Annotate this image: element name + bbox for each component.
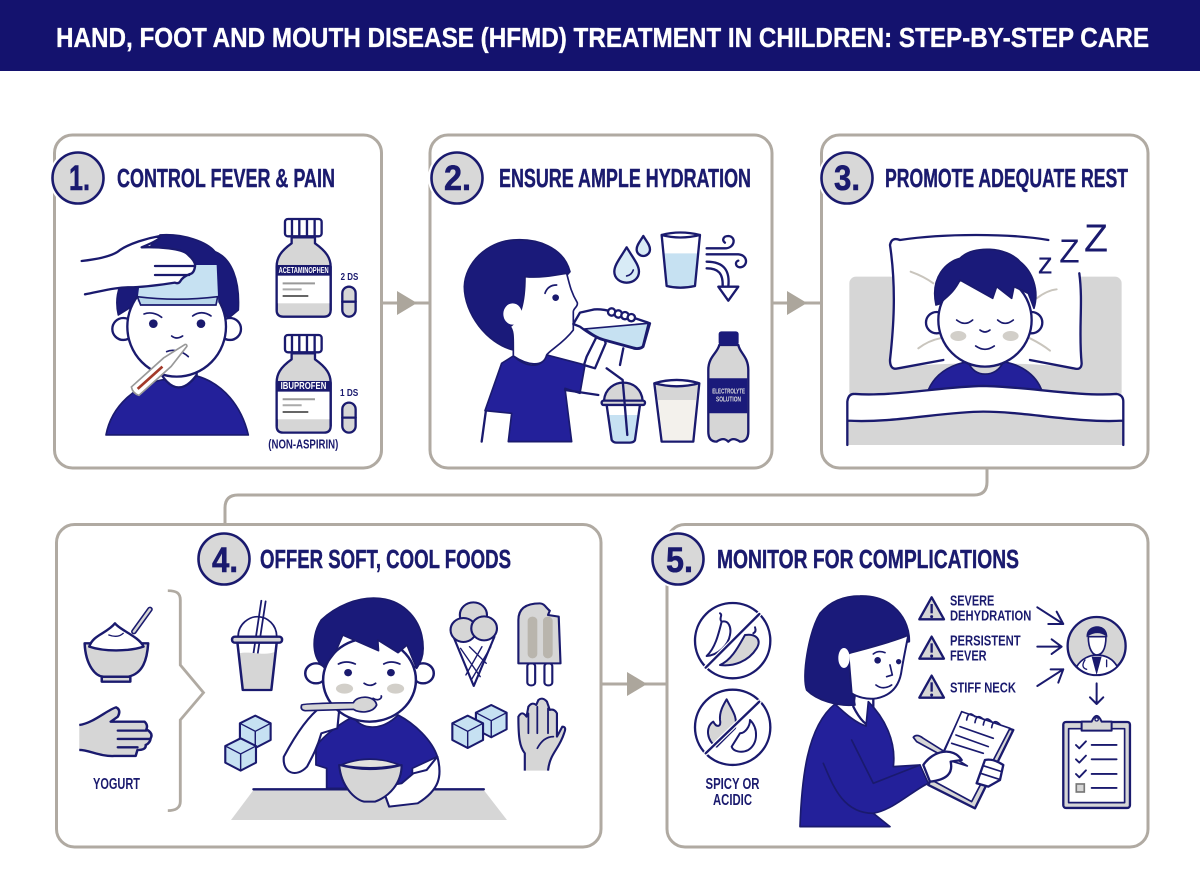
badge: number 1	[49, 149, 107, 207]
icon: popsicle	[518, 603, 561, 685]
panel: step 2 ensure ample hydration	[428, 135, 772, 468]
icon: ibuprofen bottle and pill: (NON-ASPIRIN)	[268, 436, 338, 451]
arrow: step 4 to step 5	[601, 672, 667, 696]
icon: doctor	[1068, 617, 1126, 675]
heading: monitor for complications: MONITOR FOR COMPLICATIONS	[717, 544, 1019, 574]
arrow: doctor to checklist	[1090, 683, 1103, 704]
badge: number 2: 2.	[444, 159, 471, 198]
icon: electrolyte solution bottle: ELECTROLYTE	[712, 389, 745, 396]
icon: acetaminophen bottle and pill: 2 DS	[341, 272, 358, 283]
icon: water drops	[614, 236, 650, 283]
arrows: warnings to doctor	[1037, 607, 1063, 686]
warning: stiff neck	[919, 676, 1016, 698]
icon: sleeping zzz: z	[1038, 246, 1053, 280]
icon: ice cubes right	[452, 705, 507, 748]
panel: step 4 offer soft cool foods	[56, 524, 601, 847]
icon: electrolyte solution bottle: SOLUTION	[716, 397, 741, 404]
badge: number 1: 1.	[69, 159, 90, 198]
badge: number 4: 4.	[212, 541, 238, 580]
icon: ibuprofen bottle and pill: 1 DS	[340, 388, 358, 399]
illustration: child eating with spoon at table	[231, 598, 507, 820]
label: spicy or acidic: ACIDIC	[713, 792, 752, 809]
warning: persistent fever: FEVER	[950, 649, 987, 665]
label: spicy or acidic	[706, 776, 760, 809]
heading: ensure ample hydration: ENSURE AMPLE HYDRATION	[499, 163, 751, 193]
icon: ice cream cone	[451, 602, 497, 686]
illustration: child drinking from bottle	[464, 240, 650, 442]
heading: control fever and pain: CONTROL FEVER & PAIN	[117, 163, 335, 193]
bracket	[168, 591, 204, 811]
warning: stiff neck: STIFF NECK	[950, 680, 1016, 696]
warning: persistent fever	[919, 634, 1021, 665]
warning: severe dehydration: SEVERE	[950, 594, 994, 610]
icon: open hand	[79, 707, 151, 756]
icon: wind and down arrow	[707, 236, 746, 301]
icon: smoothie cup with straw	[602, 368, 645, 443]
warning: persistent fever: PERSISTENT	[950, 634, 1021, 650]
badge: number 2	[428, 149, 486, 207]
title banner	[0, 0, 1200, 71]
icon: clipboard checklist	[1063, 716, 1130, 808]
arrow: step 2 to step 3	[771, 291, 822, 315]
icon: no acidic flames	[695, 690, 770, 765]
icon: ice cubes left	[225, 716, 271, 771]
badge: number 3: 3.	[834, 159, 860, 198]
illustration: sick child with cold pack and thermometer	[82, 235, 248, 435]
arrow: step 1 to step 2	[381, 291, 430, 315]
icon: electrolyte solution bottle	[708, 331, 748, 442]
icon: ibuprofen bottle and pill: IBUPROFEN	[281, 381, 326, 392]
illustration: caregiver writing in notebook	[800, 596, 1013, 827]
icon: sleeping zzz: Z	[1059, 233, 1080, 270]
icon: acetaminophen bottle and pill	[277, 219, 358, 317]
badge: number 3	[818, 149, 876, 207]
icon: glass of water	[662, 232, 700, 288]
icon: ibuprofen bottle and pill	[268, 335, 358, 451]
label: spicy or acidic: SPICY OR	[706, 776, 760, 793]
illustration: sleeping child in bed	[847, 235, 1123, 445]
icon: smoothie cup	[232, 601, 282, 690]
warning: severe dehydration	[919, 594, 1031, 625]
icon: glass of milk	[654, 380, 699, 442]
badge: number 4	[198, 534, 250, 584]
icon: raised hand	[518, 699, 565, 771]
warning: severe dehydration: DEHYDRATION	[950, 609, 1031, 625]
badge: number 5: 5.	[666, 541, 693, 580]
heading: offer soft cool foods: OFFER SOFT, COOL FOODS	[260, 544, 511, 574]
icon: yogurt bowl	[85, 609, 150, 682]
panel: step 1 control fever and pain	[49, 135, 382, 468]
panel: step 3 promote adequate rest	[818, 135, 1148, 468]
icon: no spicy peppers	[695, 603, 770, 678]
badge: number 5	[649, 530, 707, 588]
panel: step 5 monitor for complications	[649, 524, 1148, 847]
label: yogurt: YOGURT	[93, 776, 140, 793]
icon: sleeping zzz: Z	[1084, 217, 1108, 261]
connector: panel 3 to panel 4	[225, 468, 987, 524]
icon: acetaminophen bottle and pill: ACETAMINOPHEN	[279, 266, 329, 275]
icon: sleeping zzz	[1038, 217, 1108, 280]
